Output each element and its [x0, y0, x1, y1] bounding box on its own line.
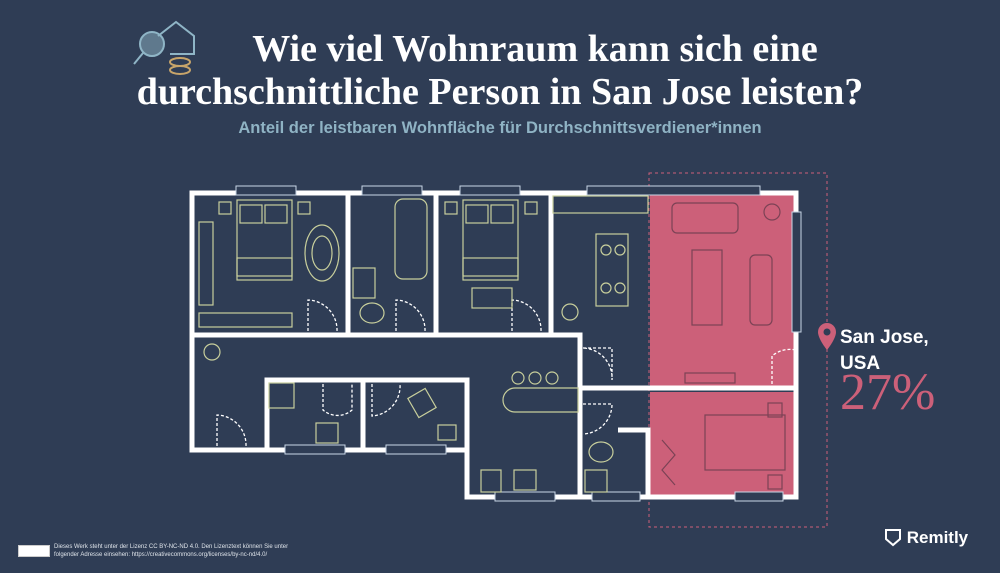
- title: durchschnittliche Person in San Jose leisten?: [137, 71, 863, 113]
- text: Dieses Werk steht unter der Lizenz CC BY-NC-ND 4.0. Den Lizenztext können Sie unter folgender Adresse einsehen: https://creativecommons.org/licenses/by-nc-nd/4.0/: [54, 544, 288, 558]
- title: Wie viel Wohnraum kann sich eine: [252, 28, 818, 70]
- walls: [192, 193, 796, 497]
- windows: [236, 186, 801, 501]
- title: [137, 28, 863, 113]
- subtitle: Anteil der leistbaren Wohnfläche für Durchschnittsverdiener*innen: [238, 119, 762, 137]
- doors: [217, 300, 796, 446]
- logo: Remitly: Remitly: [907, 528, 968, 547]
- icon: location pin: [818, 323, 836, 350]
- pink affordable area: [650, 193, 795, 497]
- label: San Jose: San Jose,: [840, 327, 929, 348]
- icon: magnifier house coins: [133, 20, 195, 75]
- label: San Jose: [840, 327, 929, 374]
- label: San Jose: USA: [840, 353, 880, 374]
- license: [18, 544, 288, 558]
- furniture: [199, 196, 648, 492]
- dashed boundary: [649, 173, 827, 527]
- value: 27%: 27%: [840, 364, 935, 421]
